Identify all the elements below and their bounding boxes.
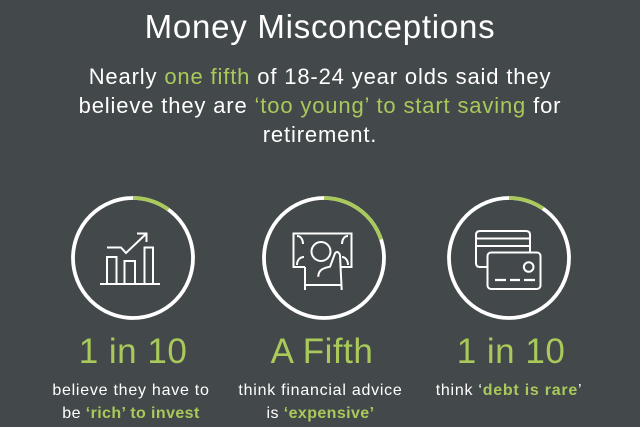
caption: advice expensive: think financial advice: [238, 382, 403, 399]
caption: advice expensive: is ‘expensive’: [267, 405, 374, 422]
caption: rich to invest: believe they have to: [52, 382, 210, 399]
caption: rich to invest: [52, 382, 210, 422]
stat: a fifth: A Fifth: [271, 332, 373, 371]
ring and icon: credit cards: [449, 198, 569, 318]
stat: 1 in 10 rich: 1 in 10: [79, 332, 187, 371]
intro text: retirement.: [263, 122, 377, 147]
intro text: Nearly one fifth of 18-24 year olds said they: [89, 64, 551, 89]
stat: 1 in 10 debt: 1 in 10: [457, 332, 565, 371]
ring and icon: growth chart: [73, 198, 193, 318]
caption: advice expensive: [238, 382, 403, 422]
intro text: believe they are ‘too young’ to start saving for: [79, 93, 561, 118]
title: Money Misconceptions: [145, 8, 495, 45]
caption: rich to invest: be ‘rich’ to invest: [62, 405, 200, 422]
ring and icon: banknote in hand: [264, 198, 384, 318]
caption: debt is rare: think ‘debt is rare’: [436, 382, 582, 399]
intro text: [79, 64, 561, 147]
